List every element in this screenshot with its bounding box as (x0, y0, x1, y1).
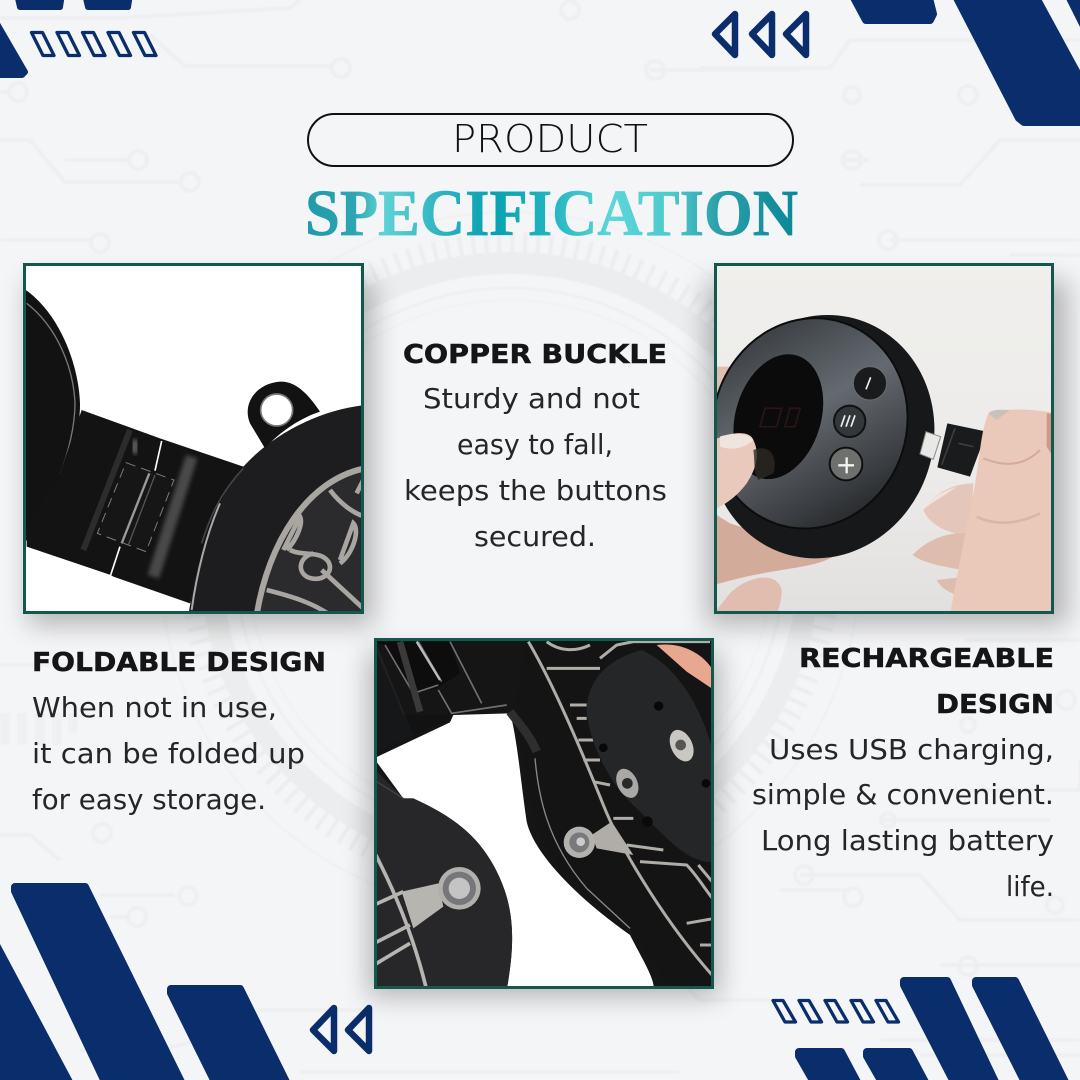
text block: rechargeable design: life. (1006, 871, 1054, 903)
title: SPECIFICATION: SPECIFICATION (305, 177, 798, 250)
panel shadows (28, 280, 1068, 997)
panel: foldable hinge photo (23, 264, 365, 615)
background concentric ring (160, 212, 860, 912)
decoration: bottom-right shapes (799, 981, 1066, 1080)
header pill: PRODUCT: PRODUCT (452, 117, 648, 161)
decoration: top-left shapes (0, 0, 130, 75)
text block: foldable design (32, 648, 326, 816)
text block: copper buckle: easy to fall, (457, 429, 613, 461)
text block: copper buckle: Sturdy and not (423, 383, 640, 415)
text block: rechargeable design: RECHARGEABLE (799, 644, 1054, 674)
decoration: bottom-left shapes (0, 887, 287, 1080)
text block: foldable design: FOLDABLE DESIGN (32, 648, 326, 678)
text block: copper buckle: keeps the buttons (404, 475, 667, 507)
text block: copper buckle: secured. (474, 521, 596, 553)
text block: rechargeable design: Long lasting battery (761, 825, 1054, 857)
text block: rechargeable design: Uses USB charging, (769, 734, 1054, 766)
text block: copper buckle (403, 340, 667, 553)
text block: rechargeable design: DESIGN (936, 690, 1054, 720)
text block: rechargeable design: simple & convenient. (752, 779, 1054, 811)
decoration: bottom-right outlined bars (773, 1000, 898, 1022)
decoration: top arrows (715, 14, 806, 55)
text block: foldable design: it can be folded up (32, 738, 305, 770)
decoration: bottom arrows (313, 1008, 369, 1051)
text block: foldable design: When not in use, (32, 692, 277, 724)
text block: copper buckle: COPPER BUCKLE (403, 340, 667, 370)
decoration: top-left outlined bars (32, 32, 156, 56)
text block: foldable design: for easy storage. (32, 784, 266, 816)
decoration: top-right shapes (852, 0, 1080, 122)
text block: rechargeable design (752, 644, 1054, 903)
panel: button detail photo (374, 638, 717, 990)
header pill: PRODUCT (308, 114, 793, 166)
panel: USB charging photo (678, 264, 1055, 615)
